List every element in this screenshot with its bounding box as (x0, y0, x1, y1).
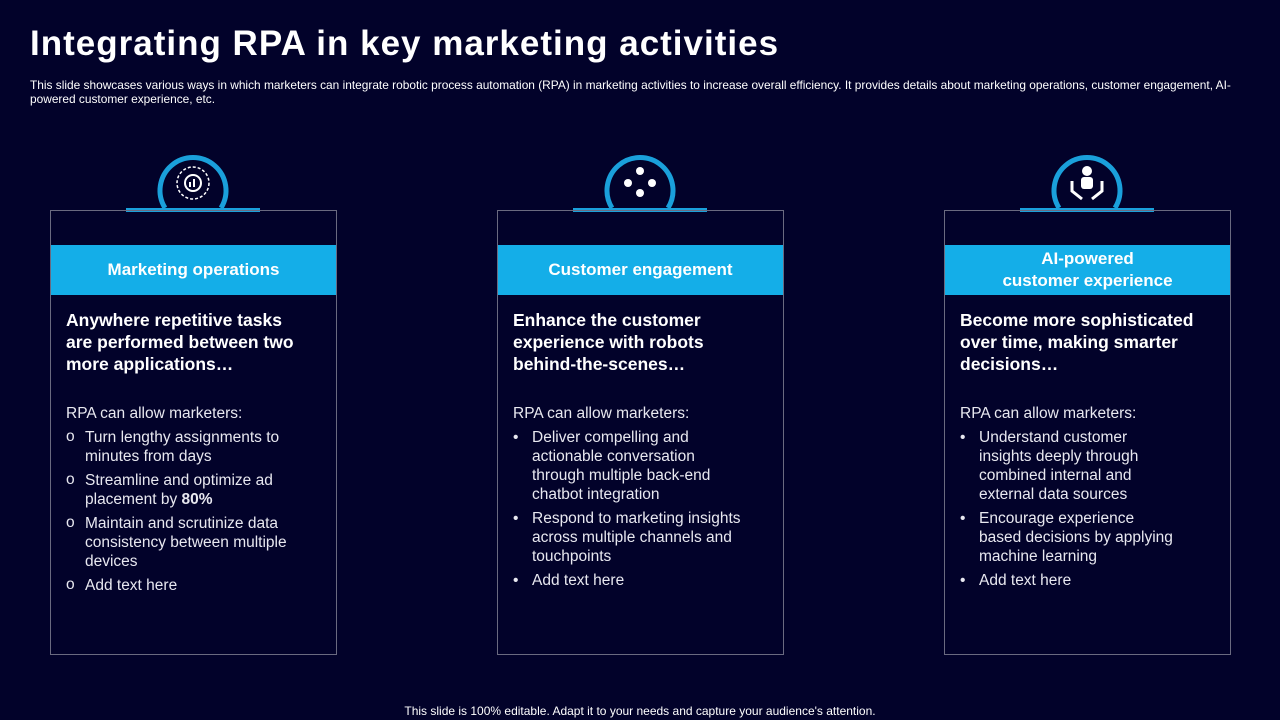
list: RPA can allow marketers: (960, 405, 1136, 422)
panel: marketing operations (50, 210, 337, 655)
header: Customer engagement (548, 260, 733, 279)
subtitle: powered customer experience, etc. (30, 92, 215, 106)
footer: This slide is 100% editable. Adapt it to your needs and capture your audience's attention. (404, 704, 876, 718)
subtitle (30, 78, 1231, 106)
list: Encourage experience (979, 510, 1134, 527)
list: Turn lengthy assignments to minutes from days (85, 429, 279, 465)
panel: customer engagement (497, 210, 784, 655)
list: insights deeply through combined internal and external data sources (979, 448, 1138, 503)
list: RPA can allow marketers: (513, 405, 689, 422)
lead: Enhance the customer experience with robots behind-the-scenes… (513, 310, 704, 374)
list: RPA can allow marketers: (66, 405, 242, 422)
list (960, 405, 1173, 589)
list: Understand customer (979, 429, 1127, 446)
header: customer experience (1002, 271, 1173, 290)
icon: customer engagement (573, 155, 707, 212)
panel: AI-powered customer experience (944, 210, 1231, 655)
header: AI-powered (1041, 249, 1134, 268)
header: Marketing operations (108, 260, 279, 279)
subtitle: This slide showcases various ways in which marketers can integrate robotic process automation (RPA) in marketing activities to increase overall efficiency. It provides details about marketing operations, customer engagement, AI- (30, 78, 1231, 92)
list (66, 405, 287, 594)
icon: AI customer experience (1020, 155, 1154, 212)
list: Deliver compelling and actionable conversation through multiple back-end chatbot integration (532, 429, 710, 503)
header (51, 245, 336, 295)
icon: marketing operations (126, 155, 260, 212)
lead: Anywhere repetitive tasks are performed between two more applications… (66, 310, 294, 374)
list (513, 405, 741, 589)
list: Add text here (85, 577, 177, 594)
list: Add text here (979, 572, 1071, 589)
list: based decisions by applying machine learning (979, 529, 1173, 565)
header (498, 245, 783, 295)
list: Streamline and optimize ad placement by 80% (85, 472, 273, 508)
list: Respond to marketing insights across multiple channels and touchpoints (532, 510, 741, 565)
lead: Become more sophisticated over time, making smarter decisions… (960, 310, 1193, 374)
list: Add text here (532, 572, 624, 589)
header (945, 245, 1230, 295)
title: Integrating RPA in key marketing activities (30, 24, 779, 63)
list: Maintain and scrutinize data consistency between multiple devices (85, 515, 287, 570)
